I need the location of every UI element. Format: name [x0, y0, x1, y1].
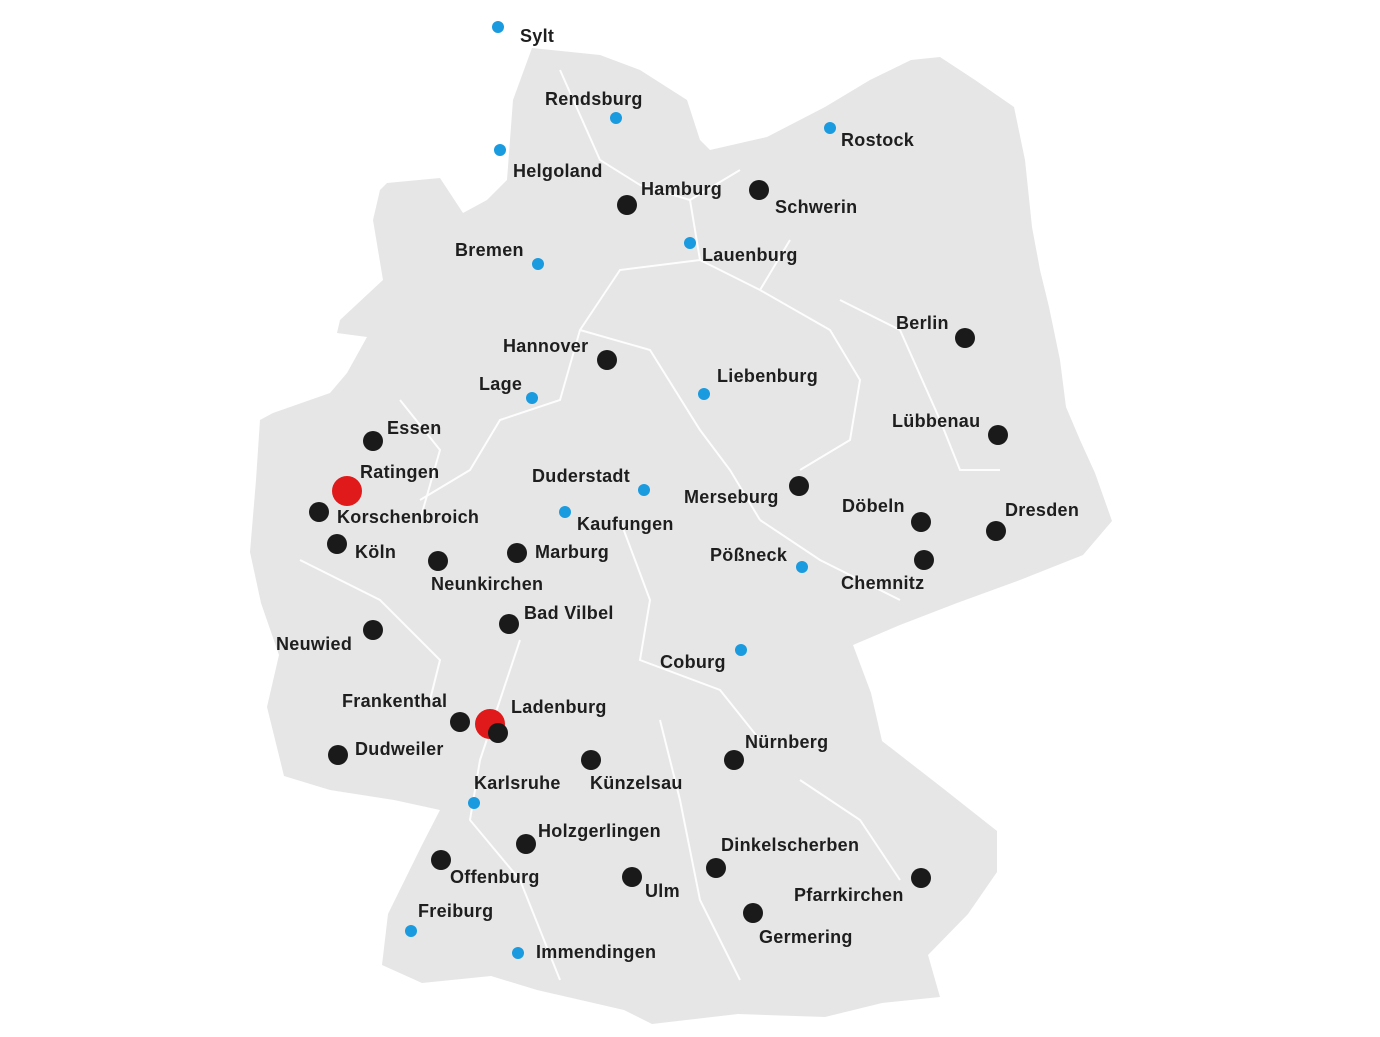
marker: Essen: Essen: [387, 418, 442, 438]
marker: Rendsburg: Rendsburg: [545, 89, 643, 109]
marker: Freiburg: [405, 901, 493, 937]
marker: Köln: Köln: [355, 542, 396, 562]
marker: Dinkelscherben: Dinkelscherben: [721, 835, 859, 855]
marker: Bremen: [455, 240, 544, 270]
marker: Kaufungen: [559, 506, 674, 534]
marker: Korschenbroich: [309, 502, 479, 527]
marker: Korschenbroich: Korschenbroich: [337, 507, 479, 527]
marker: Lage: [479, 374, 538, 404]
marker: Ladenburg: Ladenburg: [511, 697, 607, 717]
marker: Ratingen: Ratingen: [360, 462, 439, 482]
marker: Bad Vilbel: Bad Vilbel: [524, 603, 614, 623]
marker: Sylt: Sylt: [520, 26, 554, 46]
marker: Hamburg: [617, 179, 722, 215]
marker: Dinkelscherben: [706, 835, 859, 878]
marker: Duderstadt: Duderstadt: [532, 466, 630, 486]
marker: Dresden: Dresden: [1005, 500, 1079, 520]
marker: Hamburg: Hamburg: [641, 179, 722, 199]
marker: Hannover: [503, 336, 617, 370]
marker: Schwerin: [749, 180, 857, 217]
marker: Lübbenau: [892, 411, 1008, 445]
city markers and labels: [276, 21, 1079, 962]
marker: Lauenburg: [684, 237, 798, 265]
marker: Rostock: [824, 122, 915, 150]
marker: Offenburg: Offenburg: [450, 867, 540, 887]
marker: Holzgerlingen: [516, 821, 661, 854]
marker: Döbeln: [842, 496, 931, 532]
marker: Lübbenau: Lübbenau: [892, 411, 980, 431]
marker: Ladenburg: [475, 697, 607, 743]
marker: Essen: [363, 418, 442, 451]
marker: Merseburg: Merseburg: [684, 487, 779, 507]
marker: Ulm: Ulm: [645, 881, 680, 901]
marker: Berlin: Berlin: [896, 313, 949, 333]
marker: Karlsruhe: [468, 773, 561, 809]
marker: Kaufungen: Kaufungen: [577, 514, 674, 534]
marker: Germering: Germering: [759, 927, 853, 947]
marker: Nürnberg: [724, 732, 828, 770]
marker: Pößneck: [710, 545, 808, 573]
marker: Rostock: Rostock: [841, 130, 915, 150]
marker: Merseburg: [684, 476, 809, 507]
marker: Pfarrkirchen: Pfarrkirchen: [794, 885, 904, 905]
marker: Ulm: [622, 867, 680, 901]
marker: Freiburg: Freiburg: [418, 901, 493, 921]
marker: Chemnitz: Chemnitz: [841, 573, 924, 593]
marker: Schwerin: Schwerin: [775, 197, 857, 217]
marker: Neunkirchen: Neunkirchen: [431, 574, 543, 594]
marker: Neunkirchen: [428, 551, 543, 594]
marker: Liebenburg: Liebenburg: [717, 366, 818, 386]
marker: Pößneck: Pößneck: [710, 545, 788, 565]
marker: Dudweiler: [328, 739, 444, 765]
marker: Bremen: Bremen: [455, 240, 524, 260]
marker: Karlsruhe: Karlsruhe: [474, 773, 561, 793]
marker: Hannover: Hannover: [503, 336, 588, 356]
marker: Immendingen: Immendingen: [536, 942, 656, 962]
marker: Berlin: [896, 313, 975, 348]
marker: Duderstadt: [532, 466, 650, 496]
marker: Offenburg: [431, 850, 540, 887]
marker: Frankenthal: Frankenthal: [342, 691, 447, 711]
marker: Sylt: [492, 21, 554, 46]
marker: Frankenthal: [342, 691, 470, 732]
marker: Coburg: Coburg: [660, 652, 726, 672]
map: Germany outline: [250, 48, 1112, 1024]
marker: Künzelsau: Künzelsau: [590, 773, 683, 793]
marker: Marburg: [507, 542, 609, 563]
marker: Liebenburg: [698, 366, 818, 400]
marker: Ratingen: [332, 462, 439, 506]
marker: Holzgerlingen: Holzgerlingen: [538, 821, 661, 841]
marker: Neuwied: Neuwied: [276, 634, 352, 654]
marker: Künzelsau: [581, 750, 683, 793]
marker: Lauenburg: Lauenburg: [702, 245, 798, 265]
marker: Köln: [327, 534, 396, 562]
marker: Germering: [743, 903, 853, 947]
marker: Lage: Lage: [479, 374, 522, 394]
marker: Dudweiler: Dudweiler: [355, 739, 444, 759]
marker: Helgoland: Helgoland: [513, 161, 603, 181]
marker: Helgoland: [494, 144, 603, 181]
marker: Dresden: [986, 500, 1079, 541]
marker: Neuwied: [276, 620, 383, 654]
marker: Rendsburg: [545, 89, 643, 124]
marker: Marburg: Marburg: [535, 542, 609, 562]
marker: Pfarrkirchen: [794, 868, 931, 905]
marker: Nürnberg: Nürnberg: [745, 732, 828, 752]
marker: Coburg: [660, 644, 747, 672]
marker: Bad Vilbel: [499, 603, 614, 634]
marker: Chemnitz: [841, 550, 934, 593]
marker: Döbeln: Döbeln: [842, 496, 905, 516]
